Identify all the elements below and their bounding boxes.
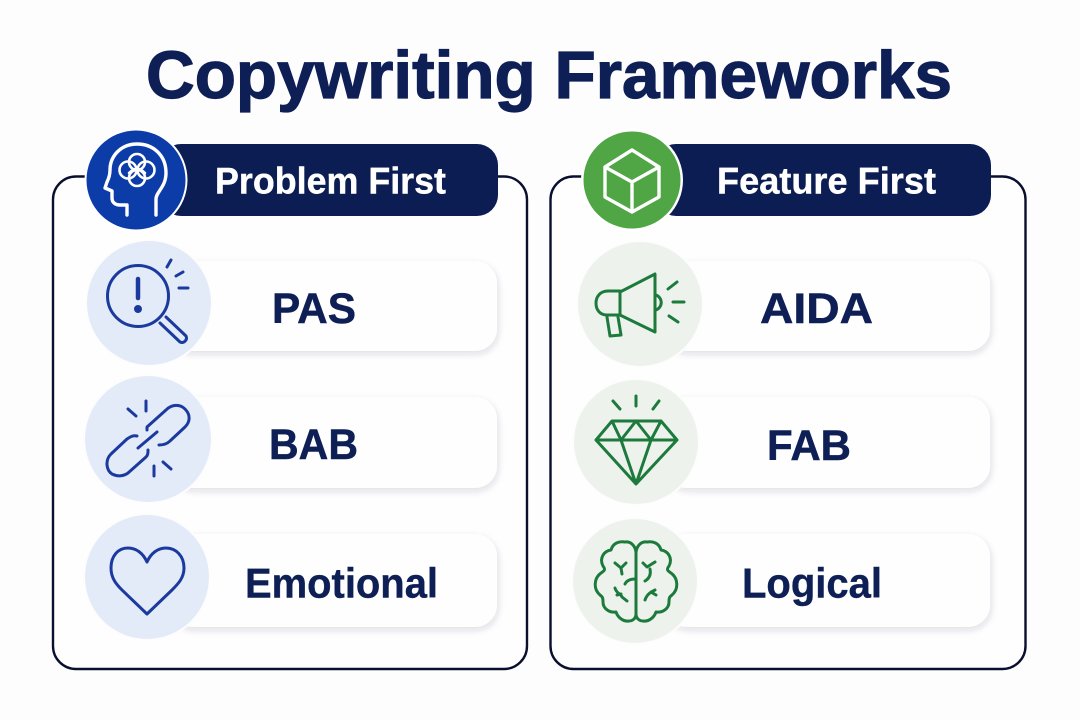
label: PAS [272, 285, 356, 333]
title: Copywriting Frameworks [146, 38, 952, 113]
icon circle [576, 240, 704, 368]
header bar [160, 144, 498, 216]
row: FAB [572, 378, 990, 506]
row: Logical [571, 517, 990, 645]
row: BAB [83, 374, 497, 504]
icon circle [83, 374, 213, 504]
icon circle [85, 239, 213, 367]
icon: broken chain [107, 401, 189, 476]
icon circle [83, 513, 211, 641]
panel: problem first [53, 128, 527, 669]
panel outline [550, 176, 1026, 669]
icon: heart [111, 548, 184, 614]
panel: feature first [550, 129, 1026, 669]
row: Emotional [83, 513, 497, 641]
icon: magnifier with exclamation [108, 260, 188, 342]
icon: cube [581, 129, 683, 231]
heading: Feature First [717, 160, 936, 202]
label: AIDA [760, 285, 873, 333]
label: FAB [767, 422, 851, 470]
header bar [655, 144, 991, 216]
icon: diamond [596, 396, 677, 484]
icon: brain [595, 542, 677, 621]
icon: head with brain [84, 128, 188, 232]
icon circle [571, 517, 699, 645]
panel outline [53, 176, 527, 669]
row: AIDA [576, 240, 990, 368]
heading: Problem First [215, 160, 446, 202]
icon circle [572, 378, 700, 506]
label: BAB [269, 421, 358, 469]
icon: megaphone [596, 274, 684, 336]
label: Emotional [245, 560, 438, 606]
label: Logical [742, 560, 882, 606]
row: PAS [85, 239, 497, 367]
